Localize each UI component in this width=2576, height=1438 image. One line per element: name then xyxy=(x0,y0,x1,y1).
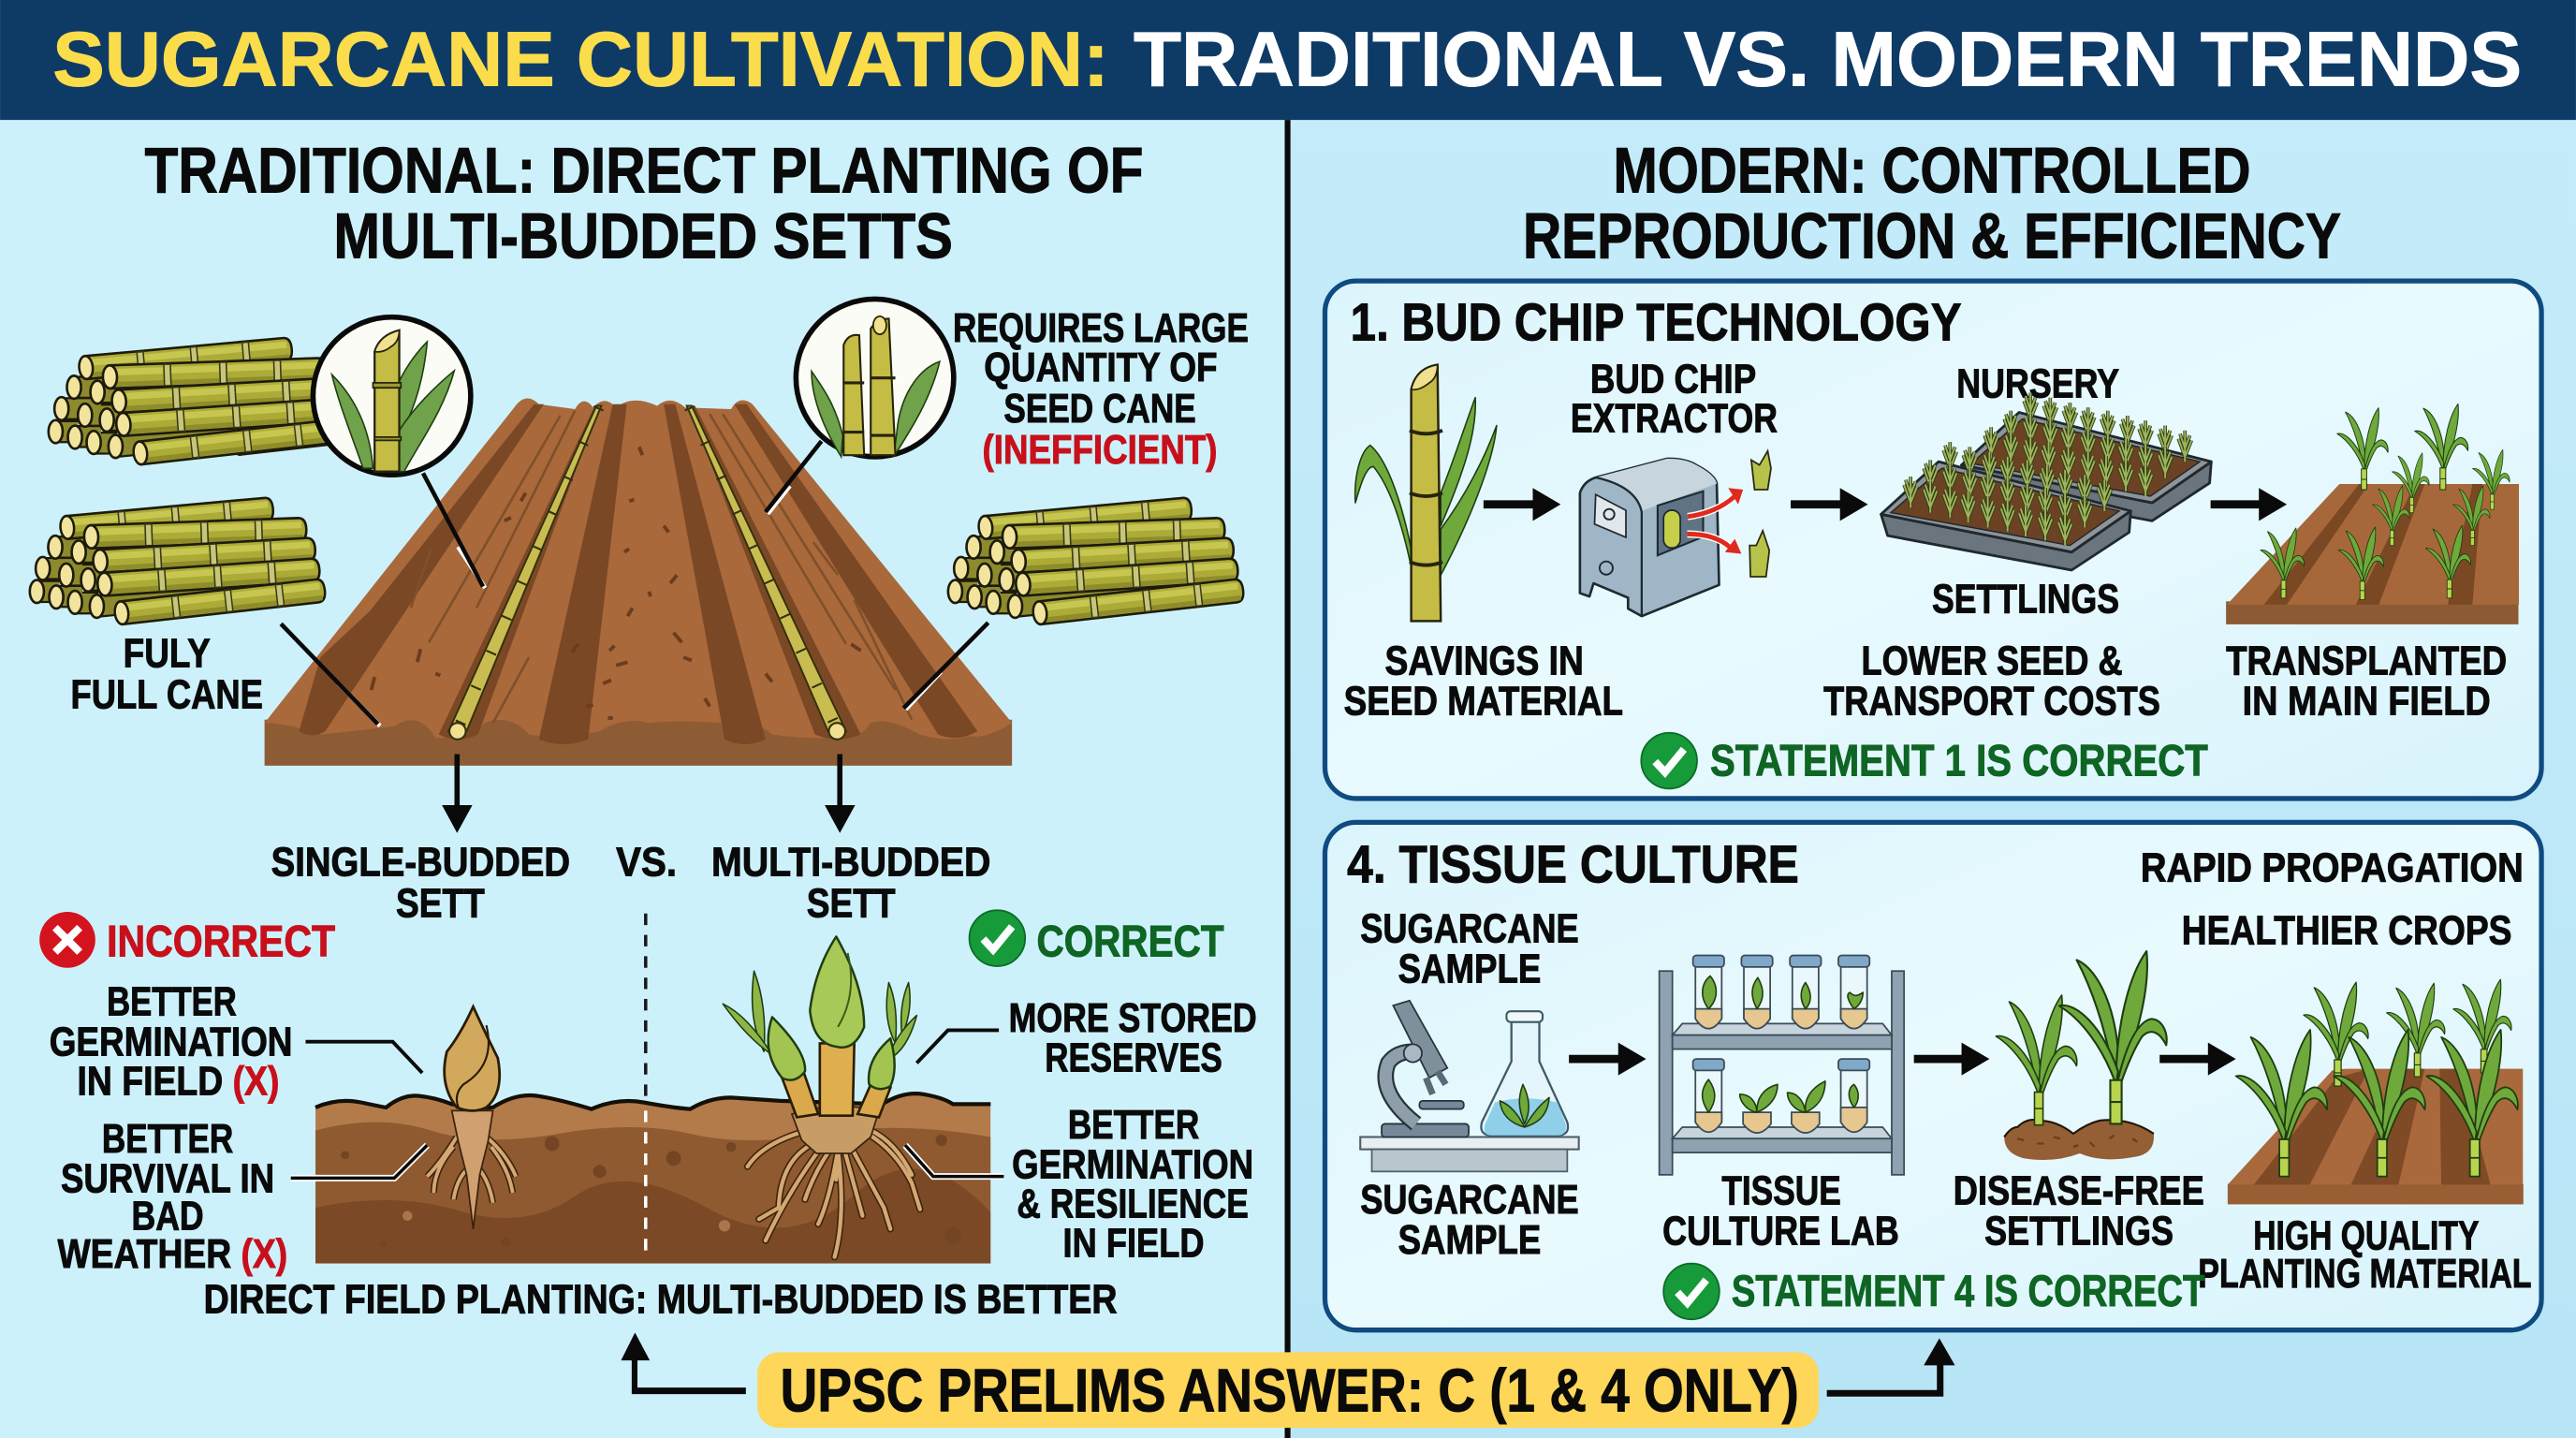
title: SUGARCANE CULTIVATION: xyxy=(52,16,1109,102)
arrow: multi-budded down xyxy=(825,755,856,833)
soil cross-section xyxy=(315,1084,990,1265)
arrow xyxy=(2159,1043,2236,1076)
answer banner: UPSC PRELIMS ANSWER: C (1 & 4 ONLY) xyxy=(781,1357,1799,1425)
center divider xyxy=(1284,120,1291,1438)
label: bud chip extractor: BUD CHIP xyxy=(1590,356,1756,402)
heading: tissue culture: 4. TISSUE CULTURE xyxy=(1347,834,1799,893)
callout: better germination (wrong): GERMINATION xyxy=(50,1020,292,1065)
label: bud chip extractor: EXTRACTOR xyxy=(1571,396,1778,442)
callout: better survival (wrong) xyxy=(57,1116,427,1277)
heading: modern: MODERN: CONTROLLED xyxy=(1613,134,2250,206)
label: single-budded sett xyxy=(271,839,570,926)
background: traditional panel xyxy=(0,0,1288,1438)
field surface xyxy=(265,398,1012,739)
callout: requires large quantity: QUANTITY OF xyxy=(984,345,1218,390)
label: single-budded sett: SETT xyxy=(396,880,485,926)
callout: requires large quantity: SEED CANE xyxy=(1003,386,1196,432)
label: high quality planting material: HIGH QUALITY xyxy=(2253,1213,2479,1259)
label: disease-free settlings: SETTLINGS xyxy=(1984,1208,2174,1254)
heading: modern: REPRODUCTION & EFFICIENCY xyxy=(1523,200,2341,272)
callout: requires large quantity xyxy=(953,305,1249,473)
callout: better germination (wrong) xyxy=(50,979,422,1105)
test tubes and pots: bottom row xyxy=(1693,1059,1869,1133)
label: savings in seed material: SEED MATERIAL xyxy=(1344,678,1623,724)
icon: transplanted field xyxy=(2226,404,2519,624)
label: single-budded sett: SINGLE-BUDDED xyxy=(271,839,570,885)
magnifier: single cane xyxy=(313,317,471,475)
label: full cane: FULL CANE xyxy=(71,671,263,717)
label: sugarcane sample top: SAMPLE xyxy=(1398,946,1541,992)
label: tissue culture lab xyxy=(1662,1167,1899,1254)
panel: traditional field illustration xyxy=(265,398,1012,766)
label: lower seed and transport costs xyxy=(1823,638,2160,724)
label: high quality planting material xyxy=(2198,1213,2532,1297)
heading: traditional xyxy=(145,134,1144,272)
icon: planted crop field xyxy=(2228,979,2524,1204)
callout: better survival (wrong): SURVIVAL IN xyxy=(61,1155,274,1201)
badge: correct xyxy=(970,910,1224,966)
label: sugarcane sample top: SUGARCANE xyxy=(1360,906,1579,952)
heading: modern xyxy=(1523,134,2341,272)
cane stack: top left xyxy=(49,337,454,465)
arrow xyxy=(1791,488,1868,521)
callout: better germination (wrong): IN FIELD (X) xyxy=(78,1059,279,1105)
label: disease-free settlings: DISEASE-FREE xyxy=(1954,1167,2204,1213)
icon: tissue culture rack xyxy=(1660,956,1904,1175)
label: transplanted in main field: IN MAIN FIELD xyxy=(2243,678,2491,724)
test tubes: top row xyxy=(1693,956,1869,1029)
furrow streaks xyxy=(411,411,912,723)
callout: better germination and resilience: IN FIELD xyxy=(1063,1221,1204,1267)
furrows xyxy=(299,404,977,744)
label: multi-budded sett: SETT xyxy=(807,880,896,926)
title: TRADITIONAL VS. MODERN TRENDS xyxy=(1134,16,2522,102)
label: savings in seed material: SAVINGS IN xyxy=(1385,638,1584,683)
icon: sugarcane stalk xyxy=(1355,365,1497,621)
icon: bud chip extractor machine xyxy=(1580,451,1771,616)
badge: correct: CORRECT xyxy=(1036,917,1224,966)
label: tissue culture lab: CULTURE LAB xyxy=(1662,1208,1899,1254)
field front xyxy=(265,720,1012,766)
label: rapid propagation: RAPID PROPAGATION xyxy=(2141,845,2524,891)
sett: left row xyxy=(448,405,601,740)
heading: traditional: TRADITIONAL: DIRECT PLANTING OF xyxy=(145,134,1144,206)
callout: requires large quantity: REQUIRES LARGE xyxy=(953,305,1249,351)
arrow: answer to traditional xyxy=(621,1332,746,1394)
verdict: statement 4 xyxy=(1663,1264,2204,1319)
label: savings in seed material xyxy=(1344,638,1623,724)
divider: dashed centre xyxy=(645,914,647,1104)
verdict: statement 1: STATEMENT 1 IS CORRECT xyxy=(1710,736,2208,785)
label: bud chip extractor xyxy=(1571,356,1778,442)
badge: incorrect: INCORRECT xyxy=(107,917,335,966)
callout: better germination and resilience: GERMINATION xyxy=(1012,1141,1253,1187)
callout: more stored reserves: RESERVES xyxy=(1045,1034,1222,1080)
label: settlings: SETTLINGS xyxy=(1932,577,2119,623)
pointer lines xyxy=(281,441,988,726)
label: multi-budded sett: MULTI-BUDDED xyxy=(711,839,990,885)
callout: better germination and resilience: BETTER xyxy=(1068,1102,1199,1148)
callout: more stored reserves xyxy=(916,995,1257,1080)
arrow: single-budded down xyxy=(442,755,473,833)
plant: single bud xyxy=(427,1006,516,1229)
panel: bud chip technology xyxy=(1325,281,2541,799)
callout: more stored reserves: MORE STORED xyxy=(1009,995,1257,1041)
callout: better germination (wrong): BETTER xyxy=(107,979,237,1025)
arrow xyxy=(2211,488,2287,521)
label: sugarcane sample bottom xyxy=(1360,1177,1579,1263)
callout: requires large quantity: (INEFFICIENT) xyxy=(983,427,1218,473)
label: healthier crops: HEALTHIER CROPS xyxy=(2182,907,2511,953)
callout: better germination and resilience xyxy=(905,1102,1253,1267)
arrow xyxy=(1569,1043,1647,1076)
arrow xyxy=(1484,488,1560,521)
arrow xyxy=(1914,1043,1989,1076)
label: transplanted in main field xyxy=(2226,638,2507,724)
icon: microscope and flask on bench xyxy=(1360,1001,1579,1171)
arrow: answer to modern xyxy=(1827,1338,1955,1397)
callout: better germination and resilience: & RESILIENCE xyxy=(1017,1181,1249,1226)
cane stack: middle left xyxy=(30,497,326,625)
label: lower seed and transport costs: TRANSPORT COSTS xyxy=(1823,678,2160,724)
verdict: statement 1 xyxy=(1641,733,2208,788)
label: sugarcane sample bottom: SAMPLE xyxy=(1398,1217,1541,1263)
label: disease-free settlings xyxy=(1954,1167,2204,1254)
callout: better survival (wrong): WEATHER (X) xyxy=(57,1231,287,1277)
plant: multi bud xyxy=(723,936,920,1257)
label: lower seed and transport costs: LOWER SEED & xyxy=(1862,638,2123,683)
panel: tissue culture xyxy=(1325,822,2541,1330)
label: nursery: NURSERY xyxy=(1956,361,2119,407)
callout: better survival (wrong): BAD xyxy=(131,1194,204,1240)
icon: nursery trays xyxy=(1881,392,2211,570)
label: transplanted in main field: TRANSPLANTED xyxy=(2226,638,2507,683)
cane stack: right xyxy=(948,497,1244,625)
label: tissue culture lab: TISSUE xyxy=(1721,1167,1841,1213)
badge: incorrect xyxy=(39,912,335,968)
background: modern panel xyxy=(1288,0,2576,1438)
magnifier: multi cane xyxy=(796,299,954,457)
icon: disease-free seedlings xyxy=(1996,951,2167,1160)
label: sugarcane sample bottom: SUGARCANE xyxy=(1360,1177,1579,1223)
label: sugarcane sample top xyxy=(1360,906,1579,992)
soil clods xyxy=(372,447,861,718)
heading: traditional: MULTI-BUDDED SETTS xyxy=(333,200,953,272)
heading: bud chip: 1. BUD CHIP TECHNOLOGY xyxy=(1351,292,1962,351)
header banner xyxy=(0,0,2576,120)
label: vs: VS. xyxy=(616,839,677,885)
sett: right row xyxy=(687,405,846,740)
conclusion: direct field planting: DIRECT FIELD PLANTING: MULTI-BUDDED IS BETTER xyxy=(204,1276,1117,1322)
label: full cane: FULY xyxy=(124,631,211,677)
label: multi-budded sett xyxy=(711,839,990,926)
callout: better survival (wrong): BETTER xyxy=(102,1116,233,1162)
verdict: statement 4: STATEMENT 4 IS CORRECT xyxy=(1732,1267,2204,1316)
title xyxy=(52,16,2522,102)
label: full cane xyxy=(71,631,263,717)
